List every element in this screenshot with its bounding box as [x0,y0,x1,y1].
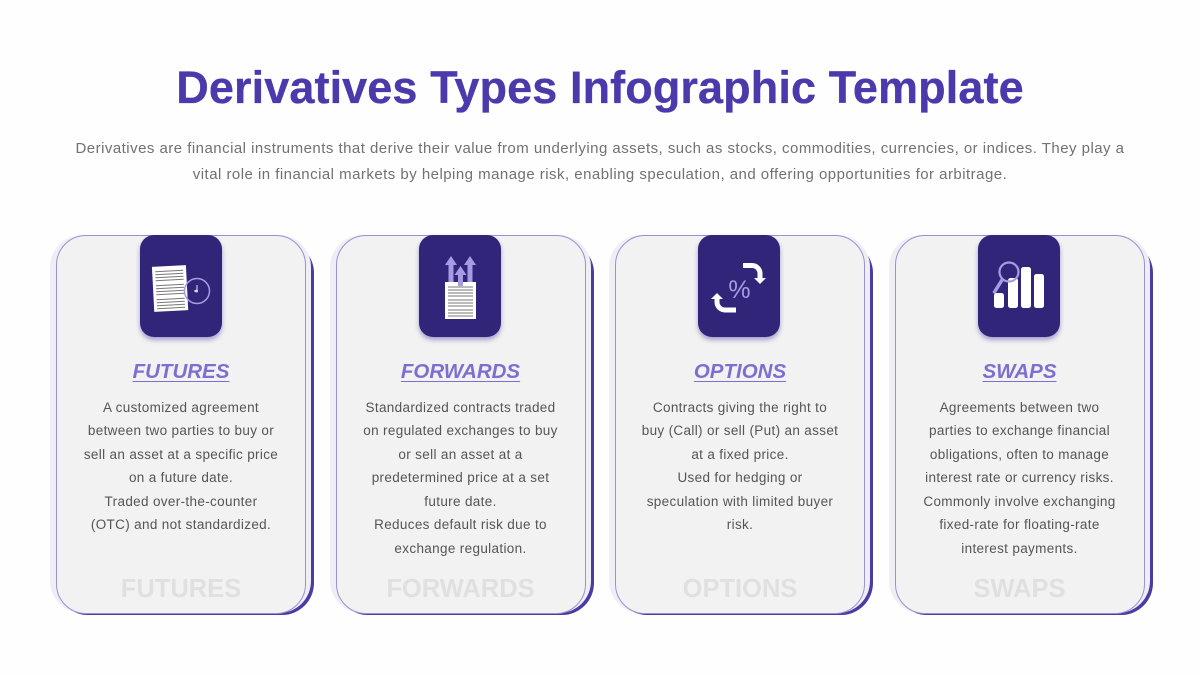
intro text [76,140,1124,183]
description: Reduces default risk due to [374,517,547,532]
description [642,400,838,532]
description [923,400,1116,556]
description: risk. [727,517,753,532]
watermark label: SWAPS [973,575,1066,603]
intro text: Derivatives are financial instruments that derive their value from underlying assets, such as stocks, commodities, currencies, or indices. They play a [76,140,1124,157]
panel: options [609,235,873,615]
description: obligations, often to manage [930,447,1109,462]
heading: FORWARDS [401,360,520,383]
panel: swaps [889,235,1153,615]
description: exchange regulation. [394,541,527,556]
description: parties to exchange financial [929,423,1110,438]
panel: futures [50,235,314,615]
description: Traded over-the-counter [105,494,257,509]
title: Derivatives Types Infographic Template [176,62,1024,113]
icon: percent with exchange arrows [698,235,780,337]
description: between two parties to buy or [88,423,274,438]
description: predetermined price at a set [372,470,549,485]
description: Standardized contracts traded [366,400,555,414]
intro text: vital role in financial markets by helping manage risk, enabling speculation, and offering opportunities for arbitrage. [193,166,1007,183]
description: (OTC) and not standardized. [91,517,271,532]
description: future date. [424,494,497,509]
description: on regulated exchanges to buy [363,423,558,438]
description: fixed-rate for floating-rate [939,517,1100,532]
icon: percent with exchange arrows: % [728,276,751,304]
icon: bar chart with magnifier [978,235,1060,337]
watermark label: FORWARDS [386,575,535,603]
panel: forwards [330,235,594,615]
description: buy (Call) or sell (Put) an asset [642,423,838,438]
description [363,400,558,556]
description: A customized agreement [103,400,259,414]
heading: FUTURES [133,360,229,383]
description: speculation with limited buyer [647,494,833,509]
description: Contracts giving the right to [653,400,827,414]
description: or sell an asset at a [398,447,523,462]
description: Commonly involve exchanging [923,494,1116,509]
description: Agreements between two [940,400,1099,414]
description: interest payments. [961,541,1078,556]
heading: SWAPS [982,360,1057,383]
icon: document and clock [140,235,222,337]
description: Used for hedging or [677,470,803,485]
description: at a fixed price. [691,447,789,462]
description: interest rate or currency risks. [925,470,1114,485]
description: sell an asset at a specific price [84,447,278,462]
icon: document with up arrows [419,235,501,337]
watermark label: FUTURES [121,575,241,603]
heading: OPTIONS [694,360,786,383]
description [84,400,278,532]
watermark label: OPTIONS [683,575,797,603]
description: on a future date. [129,470,233,485]
